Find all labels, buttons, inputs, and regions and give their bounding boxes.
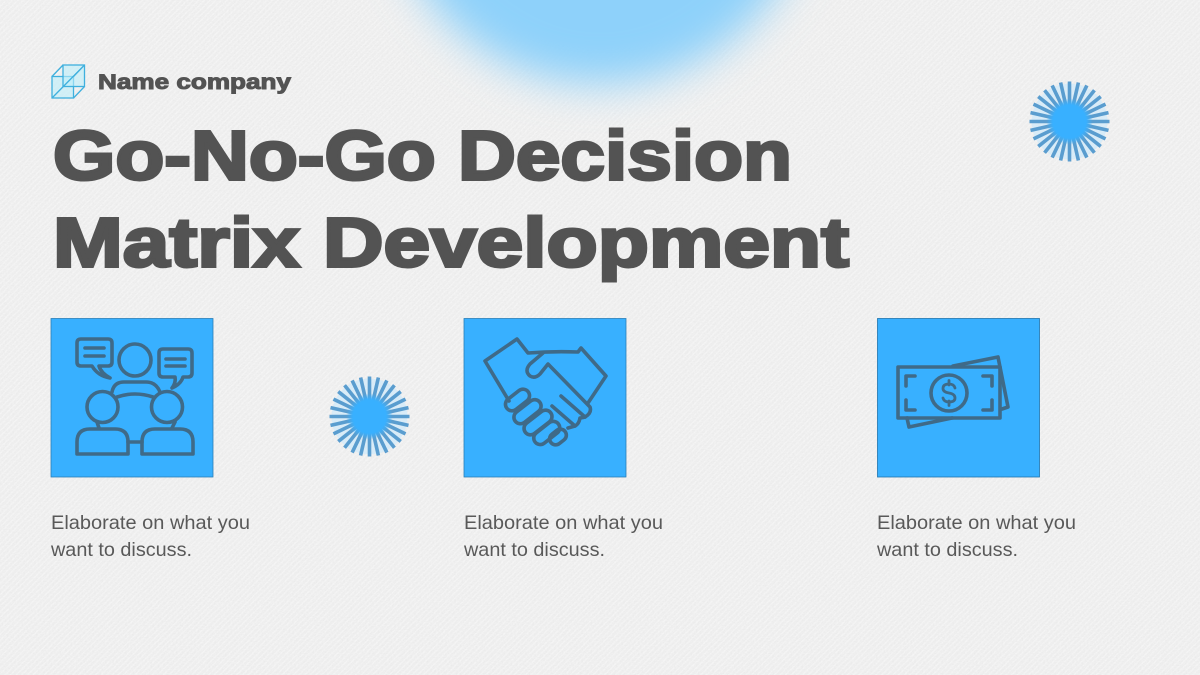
blue square [51, 318, 213, 477]
blue glow at top [386, 0, 814, 84]
panel: partnership [464, 318, 626, 477]
panel: team discussion [51, 318, 213, 477]
text: second description: Elaborate on what you [464, 512, 663, 534]
text: second description: want to discuss. [463, 539, 605, 561]
text: third description: want to discuss. [876, 539, 1018, 561]
blue square [878, 318, 1040, 477]
icon: banknotes [898, 357, 1008, 427]
company name: Name company [98, 71, 291, 94]
text: first description [50, 512, 250, 561]
icon: sunburst top right [1030, 82, 1110, 162]
title: Go-No-Go Decision [53, 116, 792, 194]
text: third description: Elaborate on what you [877, 512, 1076, 534]
text: second description [463, 512, 663, 561]
icon: people talking [77, 339, 193, 454]
icon: company logo cubes [52, 65, 84, 98]
text: third description [876, 512, 1076, 561]
text: first description: Elaborate on what you [51, 512, 250, 534]
icon: sunburst middle [330, 376, 410, 456]
icon: handshake [485, 339, 606, 447]
blue square [464, 318, 626, 477]
panel: funding [878, 318, 1040, 477]
title: Matrix Development [53, 204, 849, 282]
text: first description: want to discuss. [50, 539, 192, 561]
title [53, 116, 849, 282]
